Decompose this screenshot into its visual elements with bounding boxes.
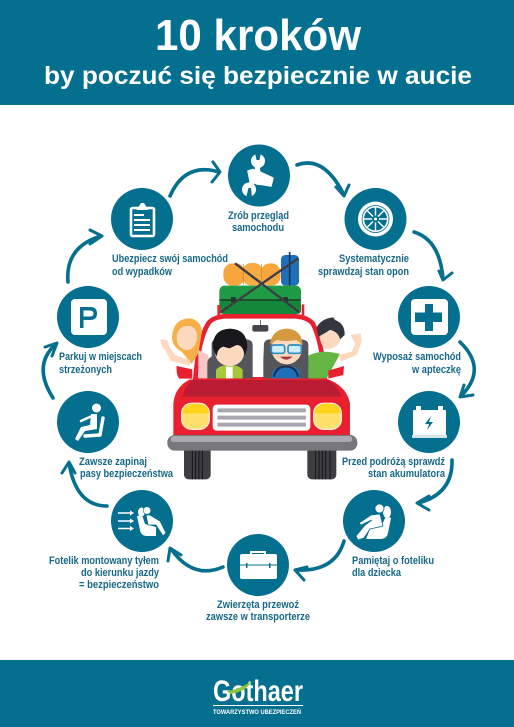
step 2 label: [318, 253, 409, 278]
step 2 label: Systematycznie: [339, 253, 409, 265]
front seats: [207, 339, 253, 378]
step 10 label: [112, 253, 228, 278]
header band: [0, 0, 514, 105]
arrow: wrench to tyre: [297, 163, 349, 196]
arrow: insurance to wrench: [170, 162, 220, 196]
step 6: transporter icon: [227, 534, 289, 596]
front wheels: [184, 443, 336, 479]
blond child with glasses: [272, 366, 300, 378]
subtitle: by poczuć się bezpiecznie w aucie: [44, 62, 472, 90]
step 10: insurance document icon: [111, 188, 173, 250]
right kid: [307, 352, 340, 378]
arrow: belts to parking: [43, 343, 57, 398]
step 2: tyre icon: [344, 188, 406, 250]
step 9 label: [59, 351, 142, 376]
footer band: [0, 660, 514, 727]
step 9 label: Parkuj w miejscach: [59, 351, 142, 363]
step 1: service icon: [228, 144, 290, 206]
step 10 label: od wypadków: [112, 266, 172, 278]
step 8 label: [79, 456, 174, 480]
arrow: first aid to battery: [460, 342, 474, 397]
step 3 label: w apteczkę: [411, 364, 461, 376]
car illustration with family and luggage: [160, 252, 362, 479]
arrow: transporter to rear-facing seat: [168, 548, 223, 571]
step 10 label: Ubezpiecz swój samochód: [112, 253, 228, 265]
dark haired child: [216, 365, 243, 378]
step 3 label: [373, 351, 461, 376]
car cabin with occupants: [160, 304, 362, 379]
arrow: child seat to transporter: [295, 541, 344, 580]
step 6 label: [206, 599, 310, 623]
car body: [173, 366, 350, 437]
step 4: battery icon: [398, 391, 460, 453]
step 3 label: Wyposaż samochód: [373, 351, 461, 363]
step 8 label: pasy bezpieczeństwa: [80, 468, 174, 480]
step 4 label: [342, 456, 446, 480]
step 8 label: Zawsze zapinaj: [79, 456, 147, 468]
logo: [213, 675, 303, 716]
step 1 label: Zrób przegląd: [228, 210, 289, 222]
step 5: child seat icon: [343, 490, 405, 552]
step 1 label: samochodu: [232, 222, 284, 234]
step 2 label: sprawdzaj stan opon: [318, 266, 409, 278]
arrow: rear-facing seat to belts: [62, 462, 107, 506]
arrow: parking to insurance: [68, 230, 102, 282]
title: 10 kroków: [155, 11, 362, 60]
step 7: rear-facing seat icon: [111, 490, 173, 552]
step 5 label: [352, 555, 434, 579]
step 4 label: stan akumulatora: [368, 468, 446, 480]
left kid: [198, 350, 208, 378]
step 5 label: Pamiętaj o foteliku: [352, 555, 434, 567]
step 9: parking icon: [57, 286, 119, 348]
logo: TOWARZYSTWO UBEZPIECZEŃ: [213, 707, 301, 716]
step 7 label: Fotelik montowany tyłem: [49, 555, 159, 567]
step 7 label: [49, 555, 160, 591]
step 4 label: Przed podróżą sprawdź: [342, 456, 445, 468]
bumper: [167, 435, 357, 451]
step 8: seat belt icon: [57, 391, 119, 453]
step 6 label: zawsze w transporterze: [206, 611, 310, 623]
luggage on the roof: [219, 252, 301, 314]
arrow: battery to child seat: [417, 460, 452, 510]
step 7 label: = bezpieczeństwo: [79, 579, 159, 591]
step 3: first aid icon: [398, 286, 460, 348]
step 7 label: do kierunku jazdy: [81, 567, 160, 579]
step 9 label: strzeżonych: [59, 364, 112, 376]
logo: Gothaer: [213, 675, 303, 708]
arrow: tyre to first aid: [414, 232, 452, 280]
step 1 label: [228, 210, 289, 234]
step 6 label: Zwierzęta przewoź: [217, 599, 299, 611]
step 5 label: dla dziecka: [352, 567, 402, 579]
